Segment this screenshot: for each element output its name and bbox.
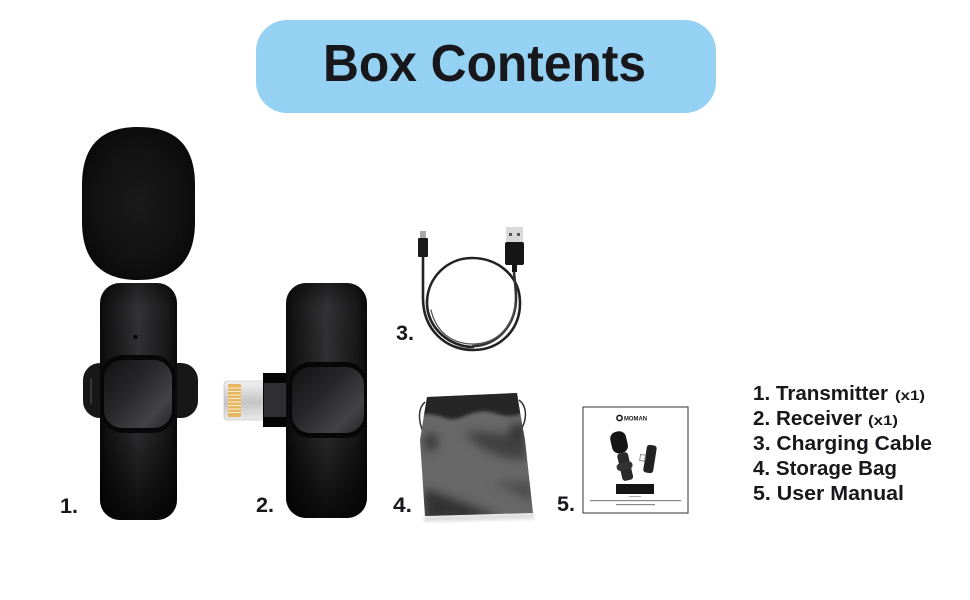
item 4: storage bag (415, 388, 540, 522)
USB A connector (505, 227, 524, 272)
lightning plug (224, 381, 266, 420)
number 1: 1. (60, 495, 78, 518)
bag shadow (424, 513, 534, 522)
transmitter body (100, 283, 177, 520)
clip button (101, 355, 175, 433)
list item 3: 3. Charging Cable (753, 433, 932, 455)
manual mini transmitter (609, 430, 636, 482)
list item 4: 4. Storage Bag (753, 458, 897, 480)
title banner (256, 20, 716, 113)
foam windscreen (82, 127, 195, 280)
item 5: user manual (583, 407, 688, 513)
item 1: transmitter microphone (82, 127, 198, 520)
cable loop (423, 257, 520, 350)
bag gathered top (424, 393, 520, 422)
number 4: 4. (393, 494, 412, 517)
list item 2: 2. Receiver (753, 408, 862, 430)
number 5: 5. (557, 493, 575, 516)
manual mini receiver (638, 444, 657, 474)
number 3: 3. (396, 322, 414, 345)
list item 1: (x1) (895, 387, 925, 403)
number 2: 2. (256, 494, 274, 517)
side clip (83, 363, 198, 418)
bag folds (424, 423, 533, 522)
indicator dot (134, 335, 138, 339)
drawstring (419, 400, 525, 432)
bag fabric (420, 393, 533, 516)
item 2: receiver with lightning plug (224, 283, 367, 518)
list item 2: (x1) (868, 412, 898, 428)
title: Box Contents (323, 35, 646, 93)
manual logo: MOMAN (624, 416, 647, 422)
list item 5: 5. User Manual (753, 483, 904, 505)
contents list (753, 383, 932, 505)
receiver button (289, 362, 367, 438)
item 3: charging cable (418, 227, 524, 350)
manual model band (616, 484, 654, 494)
manual page (583, 407, 688, 513)
manual small print (590, 496, 681, 505)
micro USB connector (418, 231, 428, 257)
receiver body (286, 283, 367, 518)
plug collar (263, 373, 289, 427)
list item 1: 1. Transmitter (753, 383, 888, 405)
